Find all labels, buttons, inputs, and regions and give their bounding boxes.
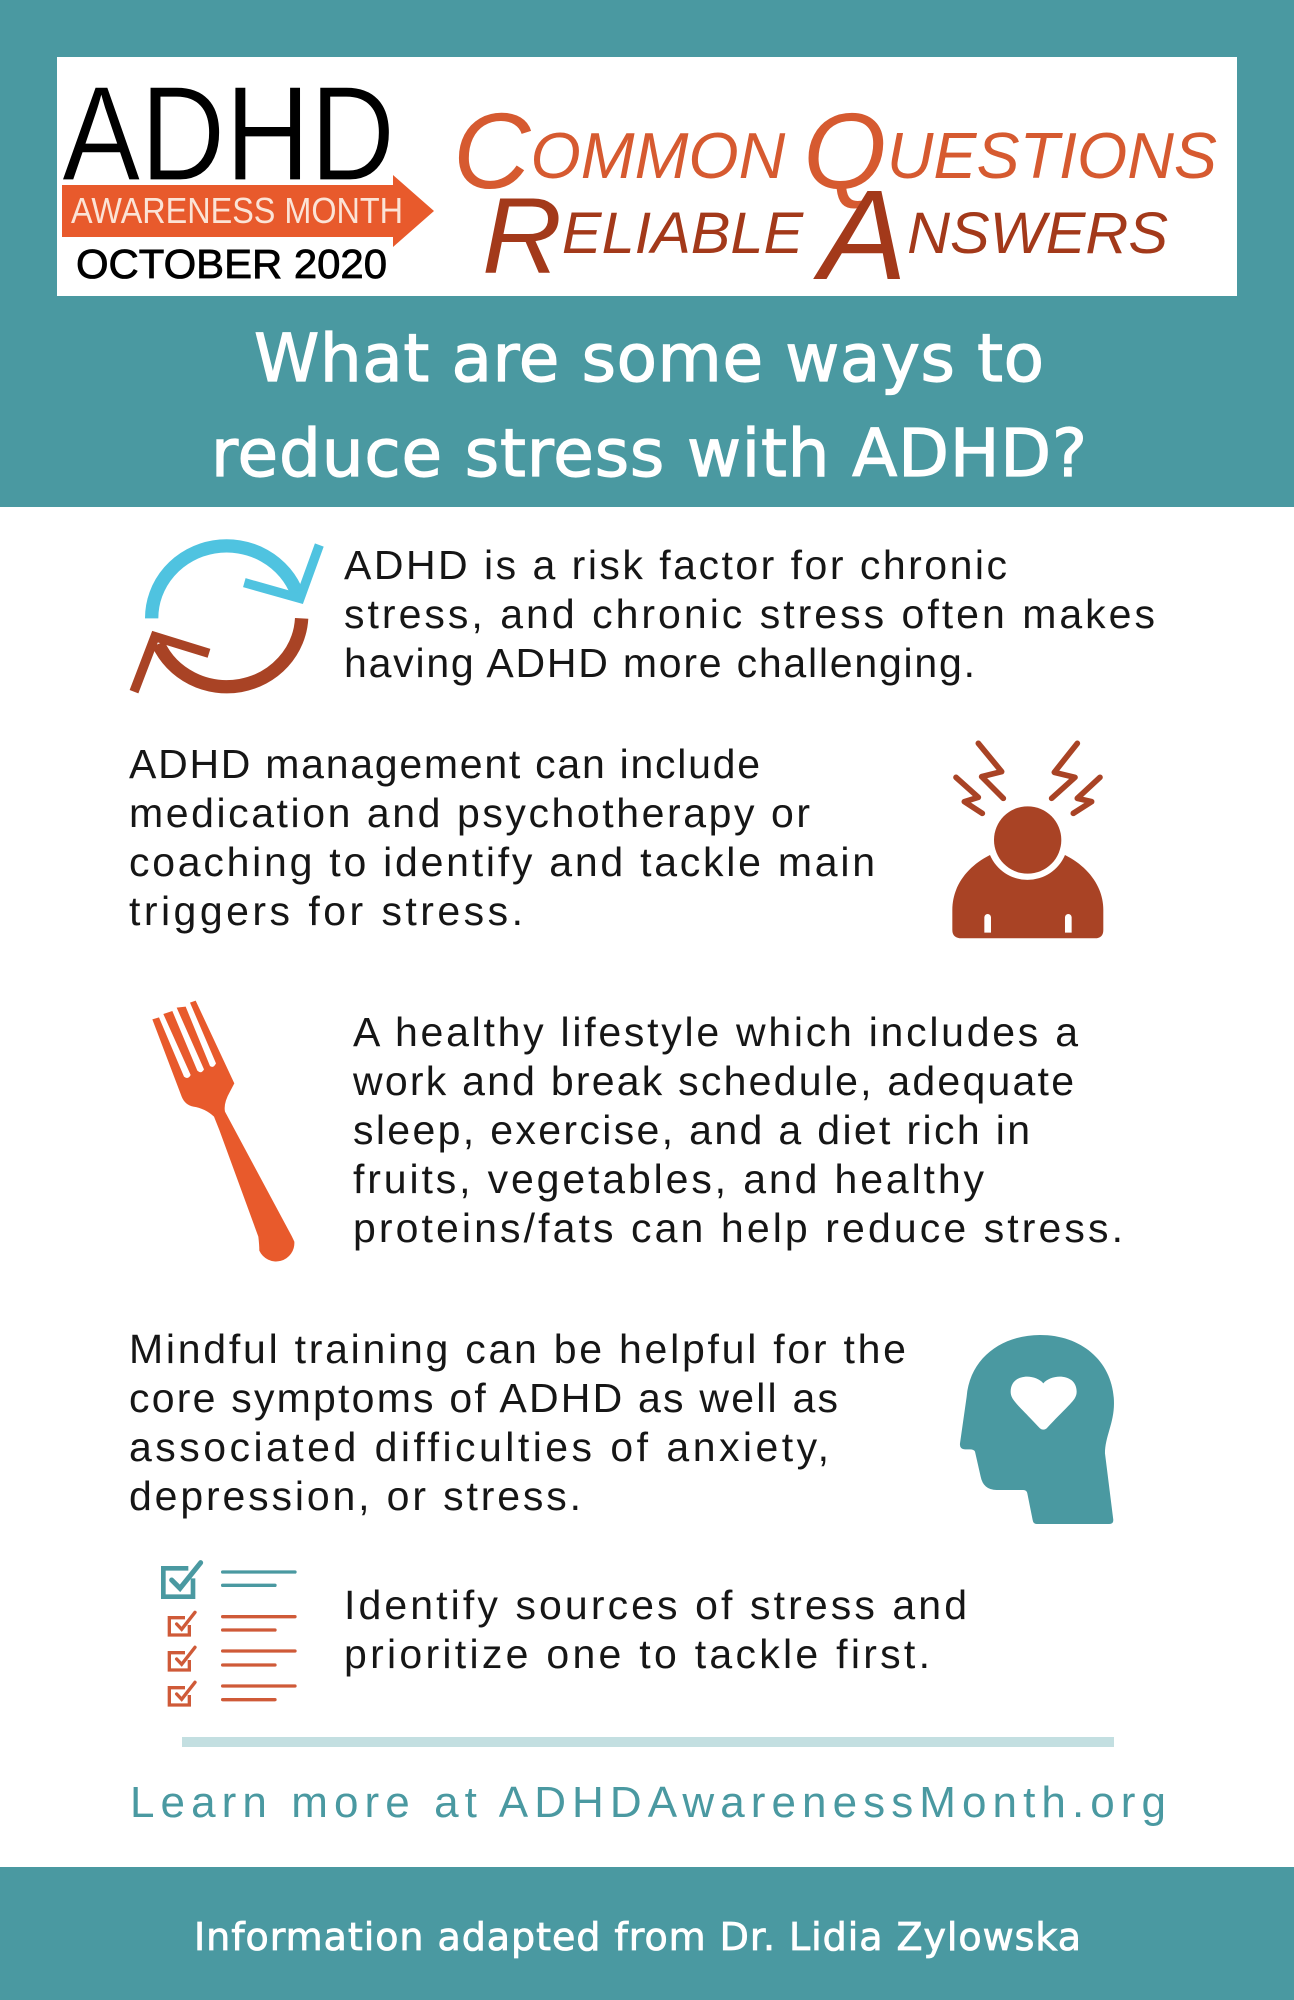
text: ADHD management: ADHD management can include [129, 741, 760, 787]
learn more link: Learn more at ADHDAwarenessMonth.org [130, 1778, 1166, 1827]
text: mindful training: Mindful training can be helpful for the [129, 1326, 906, 1372]
text: chronic stress: ADHD is a risk factor for chronic [344, 542, 1007, 588]
orange arrow [62, 175, 434, 247]
text: ADHD management: triggers for stress. [129, 888, 523, 934]
text: healthy lifestyle: A healthy lifestyle which includes a [353, 1009, 1078, 1055]
icon: fork [152, 1001, 294, 1261]
footer credit: Information adapted from Dr. Lidia Zylowska [194, 1915, 1081, 1959]
header band [0, 0, 1294, 507]
text: chronic stress: having ADHD more challenging. [344, 640, 975, 686]
text: ADHD management: coaching to identify and tackle main [129, 839, 875, 885]
main question heading: reduce stress with ADHD? [211, 415, 1087, 492]
icon: checklist [163, 1563, 295, 1705]
common questions heading: C [453, 90, 532, 211]
text: chronic stress [344, 542, 1155, 686]
text: healthy lifestyle: fruits, vegetables, and healthy [353, 1156, 984, 1202]
october 2020 label: OCTOBER 2020 [76, 241, 387, 287]
text: healthy lifestyle: sleep, exercise, and a diet rich in [353, 1107, 1030, 1153]
text: mindful training: associated difficulties of anxiety, [129, 1424, 829, 1470]
text: healthy lifestyle: work and break schedule, adequate [352, 1058, 1074, 1104]
text: identify sources: Identify sources of stress and [344, 1582, 967, 1628]
awareness month label: AWARENESS MONTH [71, 190, 403, 231]
text: ADHD management: medication and psychotherapy or [129, 790, 810, 836]
text: mindful training: depression, or stress. [129, 1473, 581, 1519]
icon: cycle arrows [134, 545, 319, 692]
text: healthy lifestyle: proteins/fats can help reduce stress. [353, 1205, 1123, 1251]
divider bar [182, 1737, 1114, 1747]
text: identify sources [344, 1582, 967, 1677]
logo banner [57, 57, 1237, 307]
common questions heading: UESTIONS [887, 119, 1217, 192]
common questions heading: Q [803, 90, 887, 211]
reliable answers heading: R [482, 175, 562, 296]
text: mindful training [129, 1326, 906, 1519]
common questions heading: OMMON [531, 119, 803, 192]
text: ADHD management [129, 741, 875, 934]
text: healthy lifestyle [352, 1009, 1123, 1251]
ADHD wordmark: ADHD [62, 58, 395, 209]
icon: head with heart [960, 1335, 1114, 1524]
text: chronic stress: stress, and chronic stress often makes [344, 591, 1155, 637]
icon: stressed person [952, 743, 1103, 938]
text: identify sources: prioritize one to tackle first. [344, 1631, 930, 1677]
text: mindful training: core symptoms of ADHD as well as [129, 1375, 838, 1421]
main question heading [211, 320, 1087, 492]
main question heading: What are some ways to [254, 320, 1044, 397]
reliable answers heading: NSWERS [907, 201, 1168, 266]
reliable answers heading: ELIABLE [562, 201, 820, 266]
reliable answers heading: A [812, 164, 907, 307]
footer band [0, 1867, 1294, 2000]
